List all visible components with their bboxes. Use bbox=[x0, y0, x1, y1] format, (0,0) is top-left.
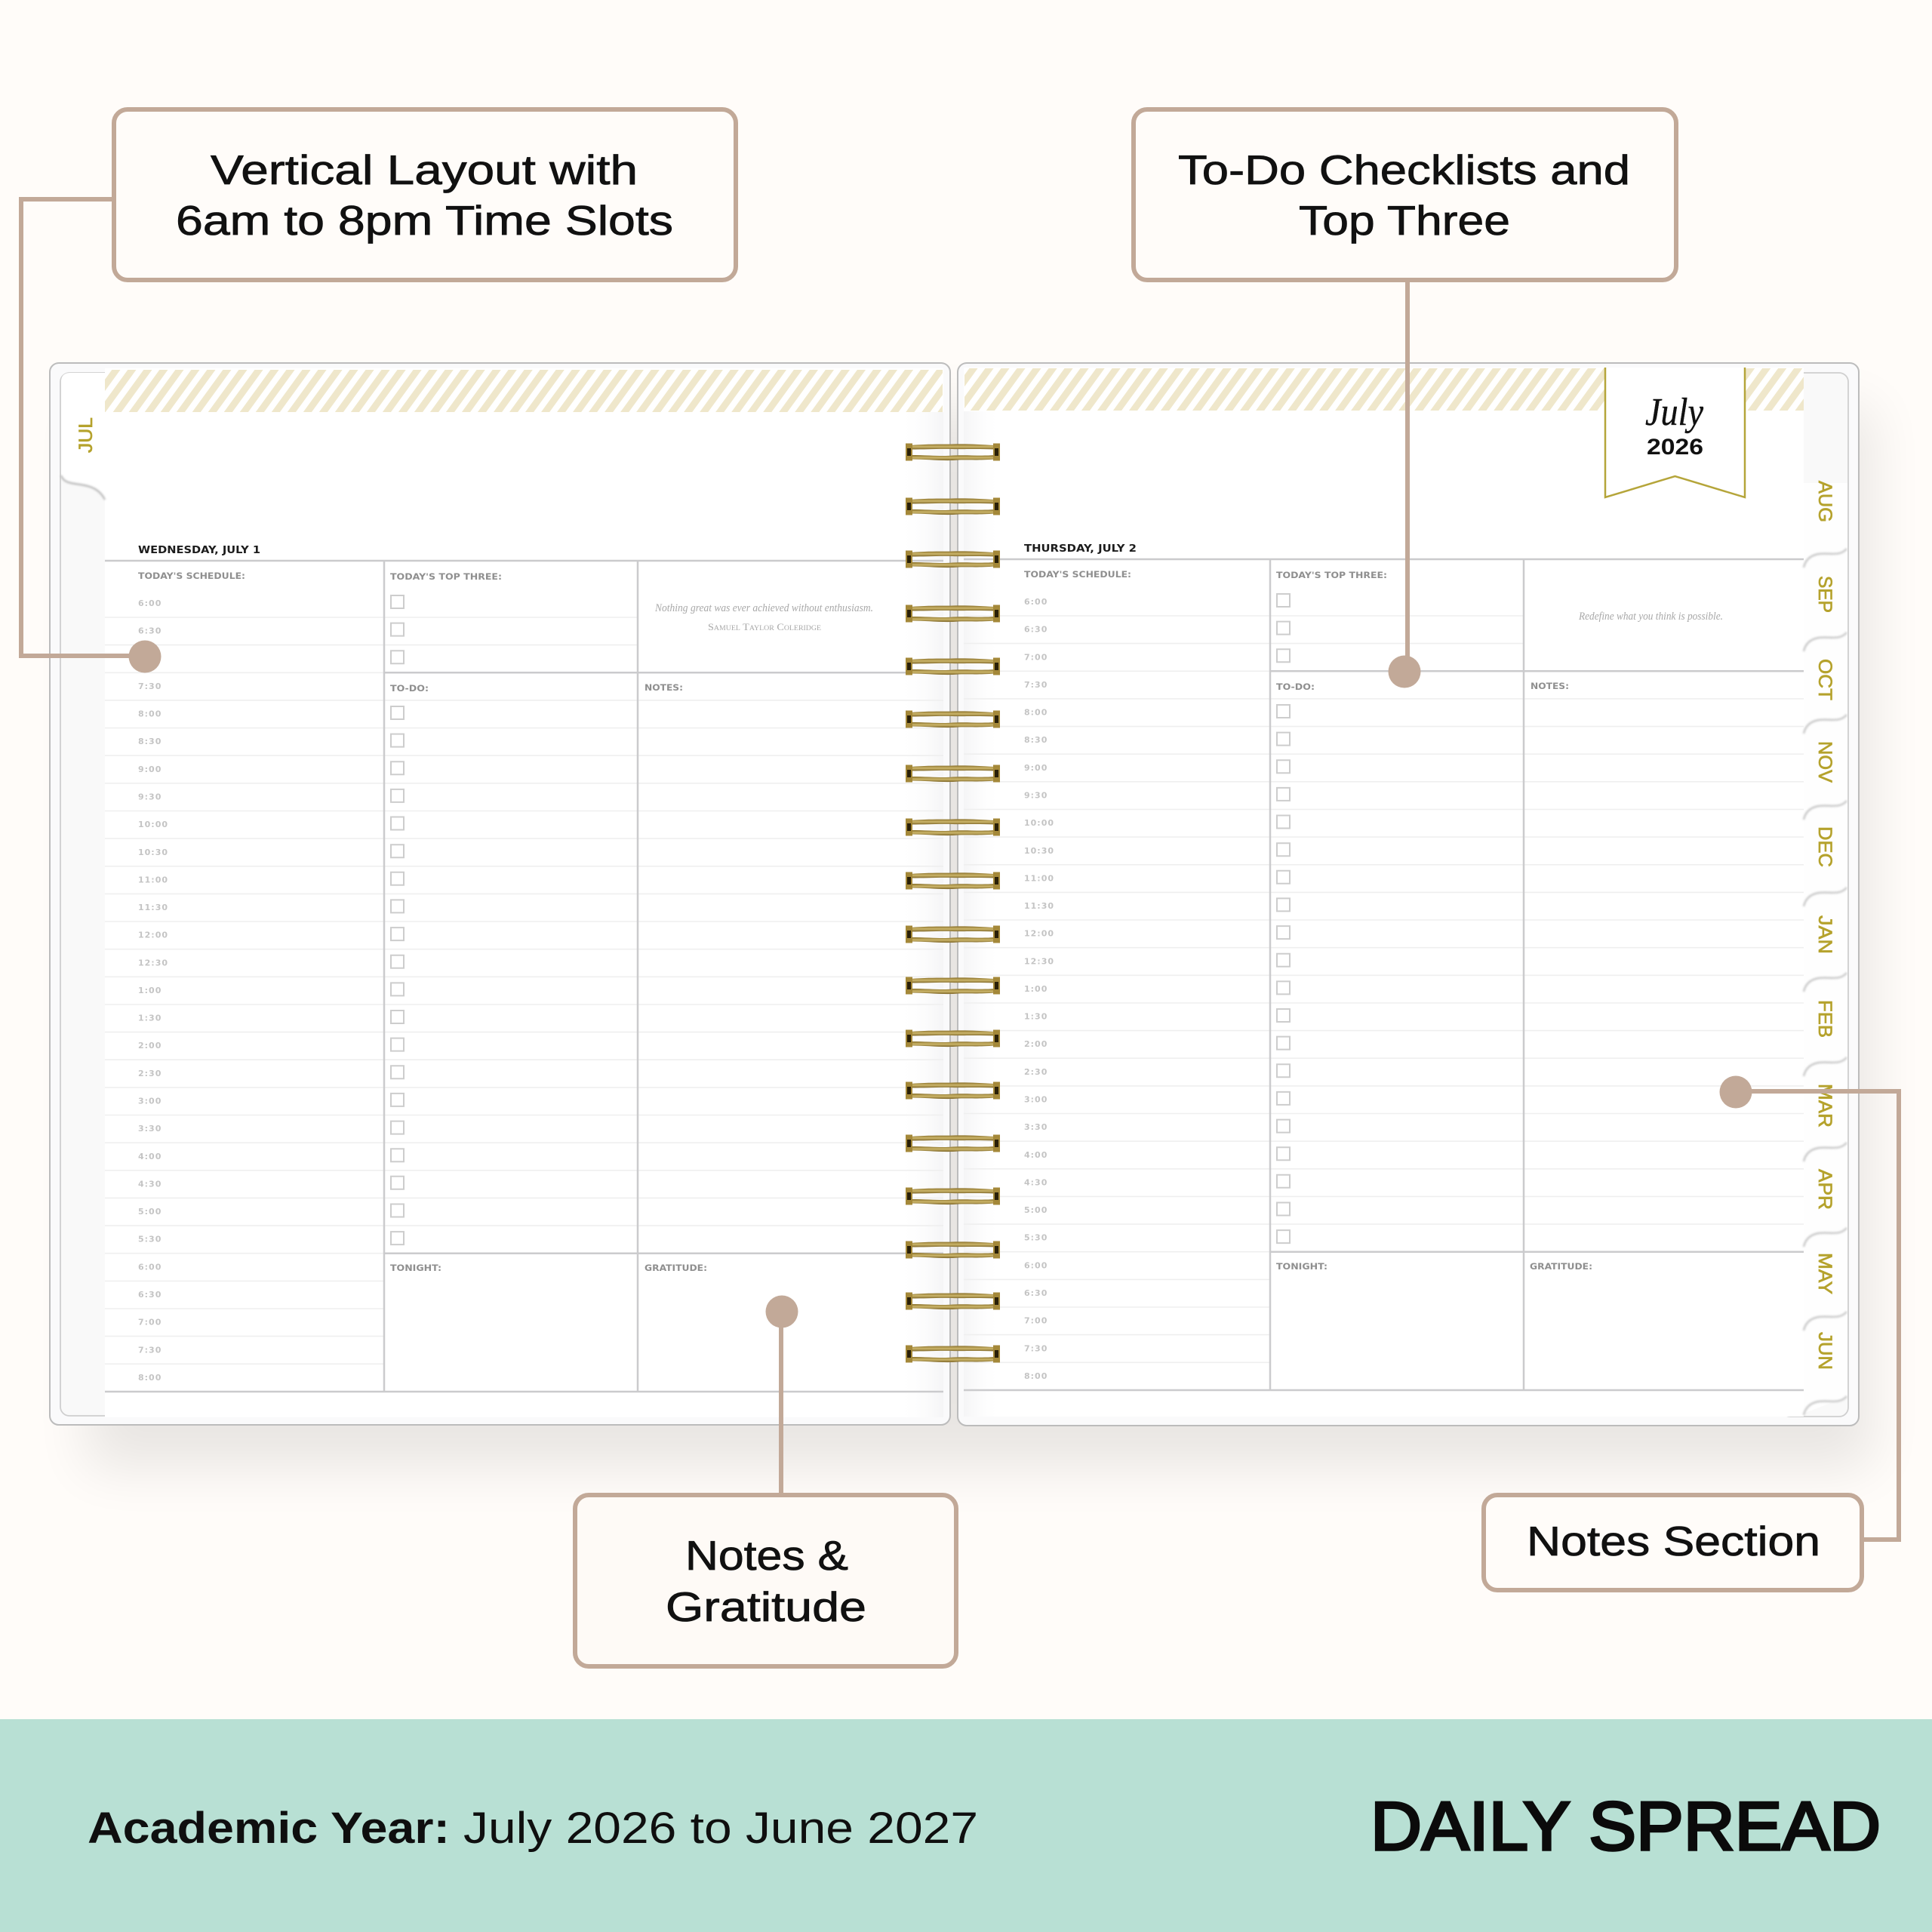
right time slots: 10:00 bbox=[1024, 818, 1054, 828]
right time slots bbox=[1024, 597, 1054, 1381]
left tonight heading: TONIGHT: bbox=[390, 1263, 441, 1273]
right cover bbox=[958, 363, 1859, 1426]
left page paper bbox=[105, 368, 943, 1417]
callout text bbox=[666, 1532, 866, 1630]
left time slots: 10:00 bbox=[138, 820, 168, 829]
callout text: 6am to 8pm Time Slots bbox=[176, 197, 673, 244]
right schedule heading: TODAY'S SCHEDULE: bbox=[1024, 569, 1131, 580]
gutter shading bbox=[898, 412, 943, 1417]
month tabs: JUN bbox=[1814, 1332, 1835, 1370]
right time slots: 9:00 bbox=[1024, 763, 1048, 773]
left time slots: 8:30 bbox=[138, 737, 162, 746]
left to-do heading: TO-DO: bbox=[390, 683, 429, 694]
marker dot bbox=[1719, 1076, 1752, 1108]
right time slots: 6:30 bbox=[1024, 1288, 1048, 1298]
right top three heading: TODAY'S TOP THREE: bbox=[1276, 570, 1387, 580]
left time slots: 2:30 bbox=[138, 1069, 162, 1078]
right time slots: 1:00 bbox=[1024, 984, 1048, 994]
left divider edge bbox=[60, 373, 121, 1416]
left time slots: 9:00 bbox=[138, 764, 162, 774]
month tabs: AUG bbox=[1814, 481, 1835, 522]
left time slots bbox=[138, 598, 168, 1383]
left time slots: 8:00 bbox=[138, 1373, 162, 1383]
academic year line: Academic Year: bbox=[88, 1804, 450, 1853]
left time slots: 11:30 bbox=[138, 903, 168, 912]
callout text bbox=[1178, 146, 1630, 244]
month tabs: MAY bbox=[1814, 1253, 1835, 1294]
month tabs: MAR bbox=[1814, 1084, 1835, 1128]
right to-do heading: TO-DO: bbox=[1276, 681, 1315, 692]
right time slots: 8:00 bbox=[1024, 1371, 1048, 1381]
left cover bbox=[50, 363, 950, 1425]
planner drop shadow bbox=[87, 408, 1872, 1468]
left time slots: 5:30 bbox=[138, 1235, 162, 1244]
callout: vertical layout bbox=[21, 109, 736, 673]
right time slots: 7:30 bbox=[1024, 1343, 1048, 1353]
right time slots: 4:30 bbox=[1024, 1177, 1048, 1187]
left time slots: 12:00 bbox=[138, 931, 168, 940]
callout text: To-Do Checklists and bbox=[1178, 146, 1630, 193]
left time slots: 12:30 bbox=[138, 958, 168, 968]
right time slots: 5:00 bbox=[1024, 1205, 1048, 1215]
right time slots: 8:30 bbox=[1024, 735, 1048, 745]
left checkboxes bbox=[391, 595, 404, 1244]
callout text: Vertical Layout with bbox=[211, 146, 638, 193]
month tabs: NOV bbox=[1814, 741, 1835, 783]
left time slots: 4:30 bbox=[138, 1179, 162, 1189]
callout: notes and gratitude bbox=[575, 1295, 956, 1666]
left time slots: 6:00 bbox=[138, 598, 162, 608]
right time slots: 7:00 bbox=[1024, 1316, 1048, 1326]
month tabs bbox=[1804, 481, 1847, 1415]
left quote bbox=[654, 602, 873, 632]
spread title: DAILY SPREAD bbox=[1371, 1789, 1881, 1865]
planner open spread bbox=[50, 363, 1859, 1426]
right time slots: 12:00 bbox=[1024, 929, 1054, 939]
left time slots: 7:30 bbox=[138, 681, 162, 691]
right page paper bbox=[964, 368, 1804, 1417]
right date heading: THURSDAY, JULY 2 bbox=[1024, 543, 1137, 555]
right tonight heading: TONIGHT: bbox=[1276, 1261, 1327, 1272]
callout text: Gratitude bbox=[666, 1583, 866, 1630]
left time slots: 7:00 bbox=[138, 654, 162, 663]
left time slots: 10:30 bbox=[138, 848, 168, 857]
callout text bbox=[176, 146, 673, 244]
left time slots: 7:30 bbox=[138, 1345, 162, 1355]
panel: right page bbox=[958, 363, 1859, 1426]
callout box bbox=[114, 109, 736, 280]
gutter shading bbox=[964, 411, 1001, 1417]
connector line bbox=[1736, 1091, 1899, 1540]
callout text: Notes Section bbox=[1527, 1518, 1820, 1564]
left time slots: 6:00 bbox=[138, 1262, 162, 1272]
month tabs: SEP bbox=[1814, 576, 1835, 613]
right time slots: 6:30 bbox=[1024, 625, 1048, 635]
right time slots: 12:30 bbox=[1024, 956, 1054, 966]
left table rules bbox=[105, 561, 943, 1392]
month tabs: OCT bbox=[1814, 659, 1835, 700]
left notes heading: NOTES: bbox=[645, 682, 683, 693]
academic year line: July 2026 to June 2027 bbox=[463, 1804, 978, 1853]
right time slots: 9:30 bbox=[1024, 791, 1048, 800]
academic year line bbox=[88, 1804, 978, 1853]
right time slots: 3:00 bbox=[1024, 1094, 1048, 1105]
spiral binding rings bbox=[906, 444, 1000, 1363]
left time slots: 2:00 bbox=[138, 1041, 162, 1051]
callout box bbox=[1134, 109, 1676, 280]
right checkboxes bbox=[1277, 594, 1290, 1243]
month tabs: FEB bbox=[1814, 1000, 1835, 1038]
left quote: Samuel Taylor Coleridge bbox=[708, 621, 822, 632]
right time slots: 1:30 bbox=[1024, 1012, 1048, 1022]
connector line bbox=[1405, 282, 1410, 672]
month tabs: DEC bbox=[1814, 826, 1835, 867]
right time slots: 5:30 bbox=[1024, 1233, 1048, 1243]
right gratitude heading: GRATITUDE: bbox=[1530, 1261, 1592, 1272]
callout text: Top Three bbox=[1299, 197, 1510, 244]
right header stripes bbox=[964, 368, 1804, 411]
left time slots: 6:30 bbox=[138, 626, 162, 636]
month banner bbox=[1605, 368, 1745, 497]
callout: notes section bbox=[1484, 1076, 1899, 1590]
JUL month tab bbox=[61, 373, 105, 500]
right time slots: 6:00 bbox=[1024, 1260, 1048, 1270]
right time slots: 6:00 bbox=[1024, 597, 1048, 607]
month tabs: JAN bbox=[1814, 915, 1835, 954]
callout box bbox=[575, 1495, 956, 1666]
right time slots: 8:00 bbox=[1024, 708, 1048, 718]
footer band bbox=[0, 1719, 1932, 1932]
left time slots: 9:30 bbox=[138, 792, 162, 801]
left time slots: 5:00 bbox=[138, 1207, 162, 1217]
left schedule heading: TODAY'S SCHEDULE: bbox=[138, 571, 245, 581]
right time slots: 3:30 bbox=[1024, 1122, 1048, 1132]
marker dot bbox=[1389, 655, 1420, 688]
callout box bbox=[1484, 1495, 1862, 1590]
right time slots: 11:30 bbox=[1024, 901, 1054, 911]
marker dot bbox=[128, 640, 162, 673]
left time slots: 3:30 bbox=[138, 1124, 162, 1134]
panel: left page bbox=[50, 363, 950, 1425]
right time slots: 11:00 bbox=[1024, 873, 1054, 883]
right divider edge bbox=[1781, 373, 1848, 1417]
left gratitude heading: GRATITUDE: bbox=[645, 1263, 707, 1273]
right time slots: 4:00 bbox=[1024, 1150, 1048, 1160]
left date heading: WEDNESDAY, JULY 1 bbox=[138, 544, 260, 556]
month tabs: APR bbox=[1814, 1169, 1835, 1210]
callout: to-do checklists bbox=[1134, 109, 1676, 688]
connector line bbox=[779, 1312, 783, 1494]
left time slots: 3:00 bbox=[138, 1096, 162, 1106]
left time slots: 1:00 bbox=[138, 986, 162, 995]
left header stripes bbox=[105, 370, 943, 412]
right quote: Redefine what you think is possible. bbox=[1578, 611, 1723, 623]
left time slots: 6:30 bbox=[138, 1290, 162, 1300]
right time slots: 2:00 bbox=[1024, 1039, 1048, 1049]
right table rules bbox=[964, 559, 1804, 1390]
right notes heading: NOTES: bbox=[1531, 681, 1569, 691]
right time slots: 7:30 bbox=[1024, 680, 1048, 690]
right time slots: 2:30 bbox=[1024, 1067, 1048, 1077]
left quote: Nothing great was ever achieved without enthusiasm. bbox=[654, 602, 873, 614]
connector line bbox=[21, 199, 145, 656]
month banner: 2026 bbox=[1647, 435, 1703, 460]
callout text: Notes & bbox=[685, 1532, 848, 1579]
right time slots: 7:00 bbox=[1024, 652, 1048, 662]
month banner: July bbox=[1645, 391, 1704, 434]
JUL month tab: JUL bbox=[75, 417, 97, 453]
marker dot bbox=[765, 1295, 798, 1328]
left top three heading: TODAY'S TOP THREE: bbox=[390, 571, 502, 582]
left time slots: 1:30 bbox=[138, 1014, 162, 1023]
left time slots: 7:00 bbox=[138, 1318, 162, 1327]
left time slots: 4:00 bbox=[138, 1152, 162, 1161]
left time slots: 8:00 bbox=[138, 709, 162, 719]
left time slots: 11:00 bbox=[138, 875, 168, 884]
right time slots: 10:30 bbox=[1024, 846, 1054, 856]
